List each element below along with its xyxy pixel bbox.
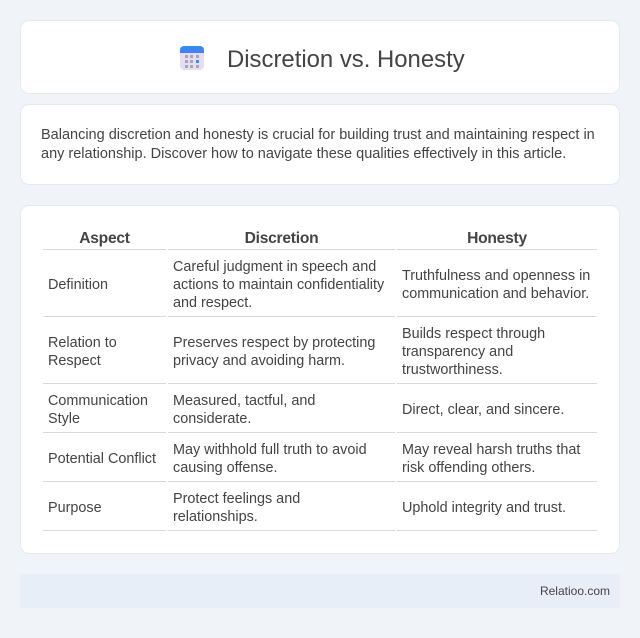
relation: honesty: [402, 326, 545, 378]
purpose: discretion: [173, 491, 300, 525]
communication: discretion: Measured, tactful, and: [173, 393, 315, 409]
row: Potential Conflict: Potential Conflict: [48, 451, 156, 467]
conflict: discretion: [173, 442, 367, 476]
intro text: Balancing discretion and honesty is crucial for building trust and maintaining respect in: [41, 127, 595, 143]
purpose: discretion: Protect feelings and: [173, 491, 300, 507]
communication: honesty: Direct, clear, and sincere.: [402, 402, 564, 418]
footer bar: [20, 574, 620, 608]
definition: discretion: and respect.: [173, 295, 252, 311]
column header: Honesty: Honesty: [467, 230, 527, 247]
row: Purpose: Purpose: [48, 500, 102, 516]
relation: discretion: privacy and avoiding harm.: [173, 353, 345, 369]
conflict: honesty: May reveal harsh truths that: [402, 442, 580, 458]
table card: [20, 205, 620, 554]
relation: honesty: transparency and: [402, 344, 513, 360]
communication: discretion: [173, 393, 315, 427]
row: Communication Style: Communication: [48, 393, 148, 409]
definition: discretion: Careful judgment in speech and: [173, 259, 376, 275]
intro text: [41, 127, 595, 162]
conflict: discretion: May withhold full truth to avoid: [173, 442, 367, 458]
definition: honesty: [402, 268, 590, 302]
conflict: honesty: [402, 442, 580, 476]
intro text: any relationship. Discover how to navigate these qualities effectively in this article.: [41, 146, 566, 162]
communication: discretion: considerate.: [173, 411, 251, 427]
row: Communication Style: Style: [48, 411, 80, 427]
column header: Aspect: Aspect: [79, 230, 130, 247]
footer text: Relatioo.com: [540, 584, 610, 598]
row: Relation to Respect: Respect: [48, 353, 101, 369]
definition: honesty: Truthfulness and openness in: [402, 268, 590, 284]
column header: Discretion: Discretion: [245, 230, 318, 247]
conflict: honesty: risk offending others.: [402, 460, 535, 476]
relation: discretion: [173, 335, 375, 369]
relation: honesty: Builds respect through: [402, 326, 545, 342]
relation: honesty: trustworthiness.: [402, 362, 503, 378]
header card: [20, 20, 620, 94]
purpose: discretion: relationships.: [173, 509, 258, 525]
title: Discretion vs. Honesty: [227, 46, 465, 73]
intro card: [20, 104, 620, 185]
row: Relation to Respect: [48, 335, 117, 369]
row: Definition: Definition: [48, 277, 108, 293]
icon: calendar: [180, 46, 204, 70]
definition: discretion: [173, 259, 384, 311]
definition: discretion: actions to maintain confidentiality: [173, 277, 384, 293]
row: Communication Style: [48, 393, 148, 427]
purpose: honesty: Uphold integrity and trust.: [402, 500, 566, 516]
row: Relation to Respect: Relation to: [48, 335, 117, 351]
relation: discretion: Preserves respect by protecting: [173, 335, 375, 351]
definition: honesty: communication and behavior.: [402, 286, 589, 302]
conflict: discretion: causing offense.: [173, 460, 278, 476]
